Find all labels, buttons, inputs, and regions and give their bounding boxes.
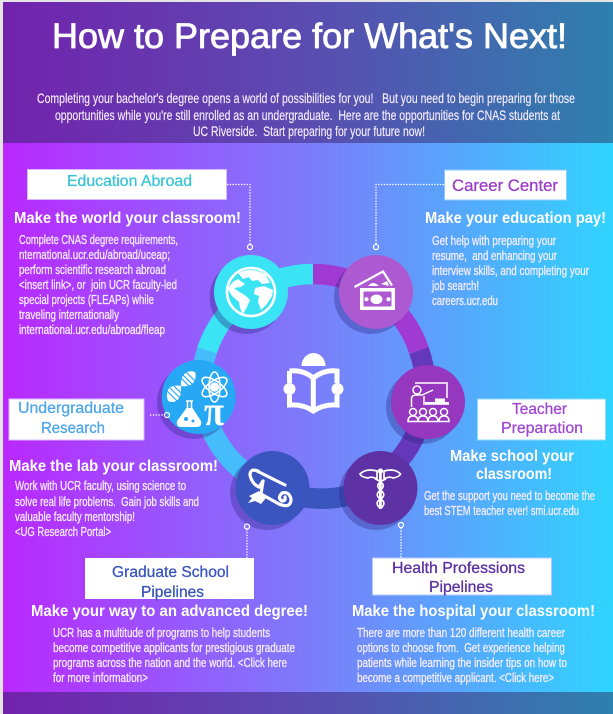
label: undergraduate research: Undergraduate xyxy=(18,400,124,417)
body: graduate school pipelines: programs across the nation and the world. <Click here xyxy=(53,656,287,670)
heading: education abroad: Make the world your classroom! xyxy=(14,210,241,227)
heading: undergraduate research: Make the lab your classroom! xyxy=(9,458,218,475)
connector: education abroad xyxy=(227,184,252,250)
label: career center xyxy=(444,170,566,200)
heading: career center: Make your education pay! xyxy=(425,210,606,227)
panel: graduate school pipelines xyxy=(31,558,308,685)
heading: teacher preparation: classroom! xyxy=(476,466,552,483)
icon: science collage xyxy=(157,360,236,439)
panel: undergraduate research xyxy=(9,399,218,539)
connector: career center xyxy=(374,184,444,250)
label: health professions pipelines xyxy=(372,558,552,596)
label: health professions pipelines: Health Professions xyxy=(392,560,525,577)
icon: caduceus xyxy=(339,451,418,530)
body: education abroad: traveling internationally xyxy=(19,308,120,322)
panel: health professions pipelines xyxy=(352,558,595,685)
icon: globe xyxy=(210,255,288,334)
header panel xyxy=(3,2,613,143)
panel: education abroad xyxy=(14,170,241,337)
label: education abroad xyxy=(28,170,226,200)
body: education abroad xyxy=(19,233,178,337)
label: education abroad: Education Abroad xyxy=(67,173,192,190)
label: graduate school pipelines xyxy=(85,558,254,601)
body: undergraduate research: Work with UCR faculty, using science to xyxy=(15,479,186,493)
body: graduate school pipelines xyxy=(53,626,295,685)
body: education abroad: perform scientific research abroad xyxy=(19,263,166,277)
body: education abroad: Complete CNAS degree requirements, xyxy=(19,233,178,247)
connector: graduate school xyxy=(244,524,250,558)
body: graduate school pipelines: for more information> xyxy=(53,671,148,685)
body: education abroad: nternational.ucr.edu/abroad/uceap; xyxy=(19,248,170,262)
body: undergraduate research: solve real life problems. Gain job skills and xyxy=(15,495,199,509)
label: graduate school pipelines: Pipelines xyxy=(141,584,204,601)
footer band xyxy=(3,692,613,714)
heading: teacher preparation xyxy=(450,448,574,483)
label: health professions pipelines: Pipelines xyxy=(429,579,493,596)
body: graduate school pipelines: UCR has a multitude of programs to help students xyxy=(53,626,270,640)
body: career center: resume, and enhancing your xyxy=(432,249,557,263)
body: career center: careers.ucr.edu xyxy=(432,294,498,308)
heading: teacher preparation: Make school your xyxy=(450,448,574,465)
ring xyxy=(202,274,426,499)
connector: undergraduate research xyxy=(150,412,170,418)
body: education abroad: <insert link>, or join UCR faculty-led xyxy=(19,278,177,292)
panel: teacher preparation xyxy=(424,399,606,518)
label: undergraduate research: Research xyxy=(41,420,105,437)
heading: health professions pipelines: Make the hospital your classroom! xyxy=(352,603,595,620)
intro text xyxy=(37,90,575,139)
connector: health professions xyxy=(398,522,404,558)
pi symbol: π xyxy=(204,389,224,435)
label: graduate school pipelines: Graduate School xyxy=(112,564,229,581)
label: career center: Career Center xyxy=(452,176,558,195)
icon: diploma scroll xyxy=(230,451,310,530)
body: health professions pipelines: become a competitive applicant. <Click here> xyxy=(357,671,554,685)
label: teacher preparation xyxy=(478,399,606,440)
atom xyxy=(199,372,230,402)
body: undergraduate research xyxy=(15,479,199,539)
title: How to Prepare for What's Next! xyxy=(52,17,567,56)
heading: graduate school pipelines: Make your way to an advanced degree! xyxy=(31,603,308,620)
body: career center: Get help with preparing your xyxy=(432,234,556,248)
label: teacher preparation: Teacher xyxy=(512,401,567,418)
flask xyxy=(177,401,201,427)
body: health professions pipelines xyxy=(357,626,567,685)
body: education abroad: international.ucr.edu/abroad/fleap xyxy=(19,323,165,337)
label: undergraduate research xyxy=(9,399,144,440)
icon: money xyxy=(334,255,413,334)
body: teacher preparation xyxy=(424,489,595,518)
body: career center xyxy=(431,234,589,308)
panel: career center xyxy=(425,170,606,308)
body: education abroad: special projects (FLEAPs) while xyxy=(19,293,154,307)
body: undergraduate research: <UG Research Portal> xyxy=(15,525,111,539)
icon: teacher and students xyxy=(386,365,465,444)
body: graduate school pipelines: become competitive applicants for prestigious graduate xyxy=(53,641,295,655)
main background panel xyxy=(3,143,613,692)
icon: open book reader xyxy=(284,353,344,411)
body: health professions pipelines: There are more than 120 different health career xyxy=(357,626,565,640)
body: career center: job search! xyxy=(431,279,479,293)
intro text: UC Riverside. Start preparing for your future now! xyxy=(193,123,425,139)
dna helix xyxy=(167,371,197,402)
body: undergraduate research: valuable faculty mentorship! xyxy=(15,510,135,524)
label: teacher preparation: Preparation xyxy=(501,420,583,437)
